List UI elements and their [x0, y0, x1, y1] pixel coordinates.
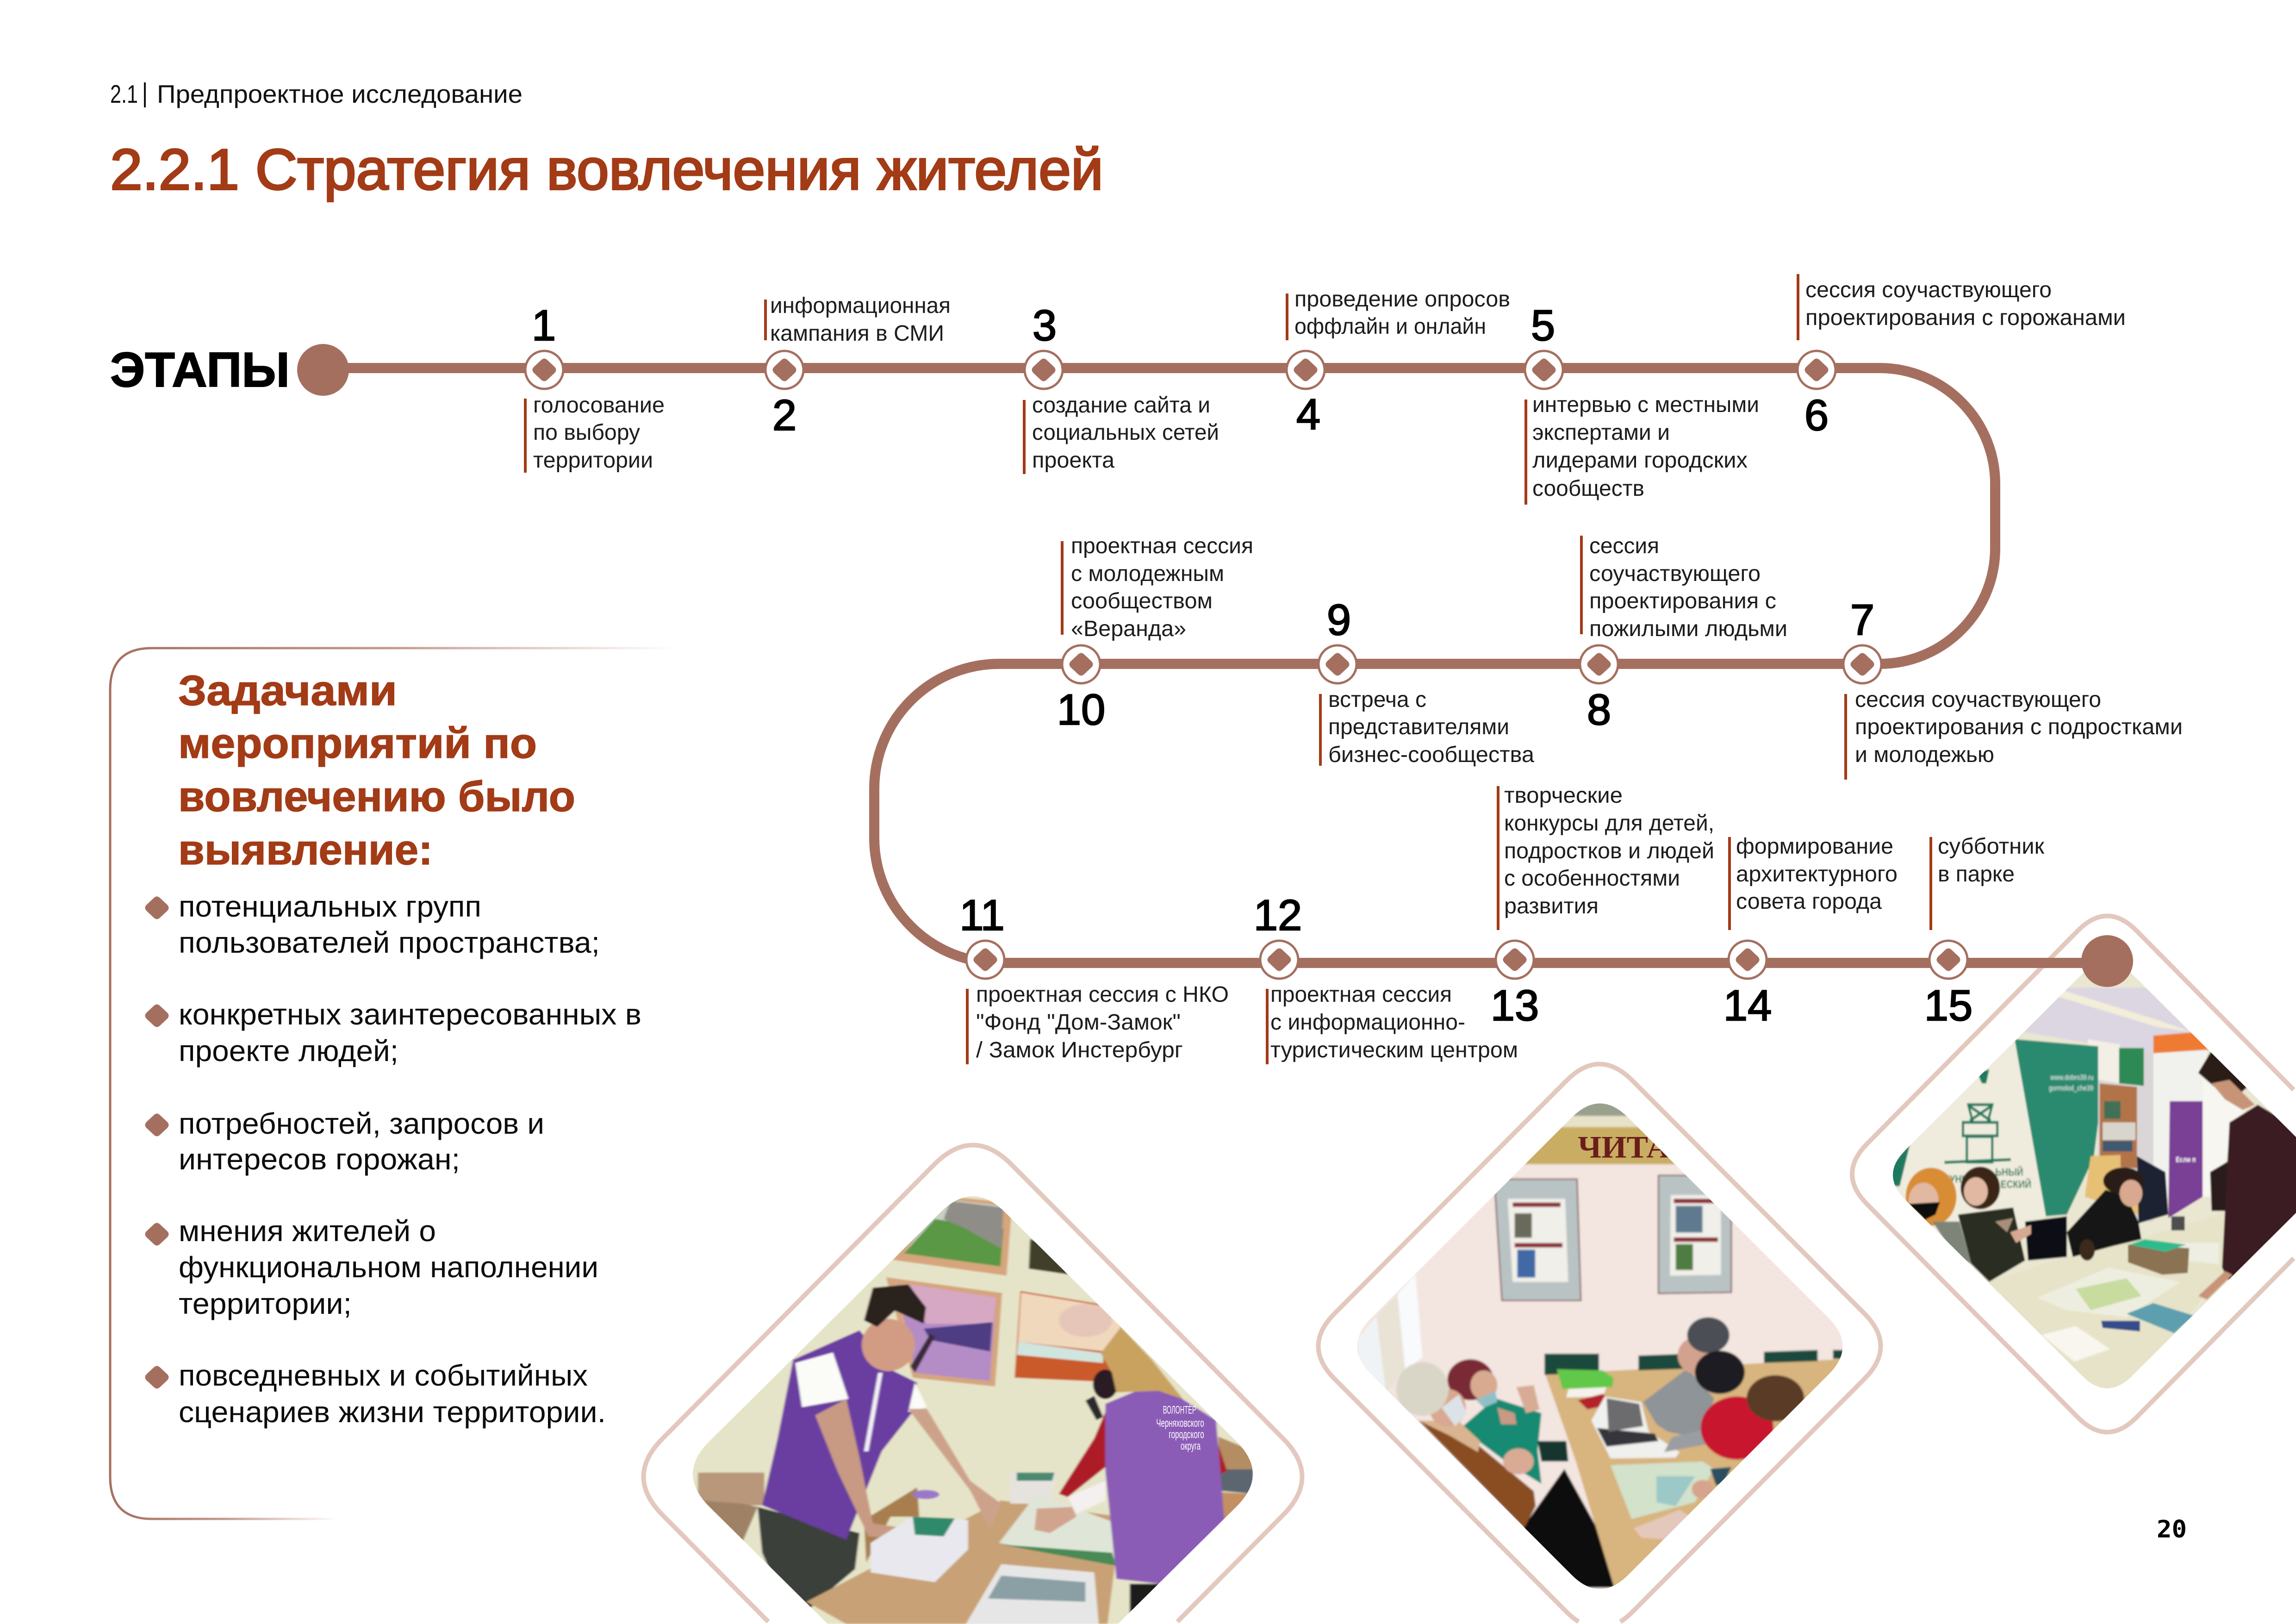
stage 14: 14	[1724, 981, 1772, 1030]
stage 10	[1057, 534, 1253, 734]
stage 4: оффлайн и онлайн	[1294, 314, 1486, 339]
stage 5: сообществ	[1532, 476, 1644, 501]
photo: volunteers with purple vests: городского	[1169, 1429, 1204, 1441]
stage 7: сессия соучаствующего	[1855, 687, 2101, 712]
stage 8	[1580, 534, 1787, 734]
stage 12: туристическим центром	[1270, 1038, 1518, 1062]
stage 14: формирование	[1736, 834, 1893, 859]
stage 9: 9	[1327, 595, 1351, 644]
stage 12: с информационно-	[1270, 1010, 1465, 1035]
stage 9: встреча с	[1328, 687, 1426, 712]
stage 8: сессия	[1589, 534, 1659, 558]
panel heading: Задачами	[178, 667, 397, 714]
section header: 2.1	[110, 80, 138, 108]
stage 14: совета города	[1736, 889, 1882, 914]
end marker	[2081, 935, 2133, 987]
stage 10: проектная сессия	[1071, 534, 1253, 558]
stage 2: 2	[772, 391, 796, 439]
stage 3: проекта	[1032, 448, 1114, 473]
stage 11: 11	[959, 891, 1005, 939]
photo: volunteers with purple vests: Черняховского	[1156, 1417, 1204, 1430]
stage 6: сессия соучаствующего	[1805, 278, 2052, 302]
bullet 5: повседневных и событийных	[179, 1359, 588, 1392]
bullet 3: интересов горожан;	[179, 1143, 460, 1176]
bullet 3	[145, 1107, 544, 1176]
stage 4: проведение опросов	[1294, 287, 1510, 312]
stage 3: социальных сетей	[1032, 420, 1219, 445]
stage 13: подростков и людей	[1504, 839, 1714, 863]
bullet 2	[145, 998, 641, 1068]
stage 10: 10	[1057, 685, 1105, 734]
bullet 2: конкретных заинтересованных в	[179, 998, 641, 1031]
bullet 4: территории;	[179, 1287, 352, 1320]
stage 6	[1797, 274, 2126, 439]
bullet 1: потенциальных групп	[179, 890, 481, 923]
stage 8: 8	[1587, 685, 1611, 734]
section header: Предпроектное исследование	[157, 80, 523, 108]
stage 15	[1924, 834, 2045, 1030]
stage 7: 7	[1850, 595, 1874, 644]
stage 13	[1491, 783, 1714, 1030]
stage 13: развития	[1504, 894, 1599, 918]
stage 11: проектная сессия с НКО	[976, 982, 1229, 1007]
stage 5: экспертами и	[1532, 420, 1670, 445]
timeline path	[323, 368, 2107, 963]
stage 7	[1843, 595, 2183, 780]
photo: session with youth	[1873, 931, 2296, 1399]
stage 9	[1319, 595, 1534, 767]
vest lettering	[1156, 1404, 1204, 1452]
stage 3	[1023, 301, 1219, 474]
wall sign lettering: ЧИТА	[1578, 1130, 1670, 1164]
photo: session with youth: www.dobro39.ru	[2050, 1074, 2093, 1081]
stage 1: голосование	[533, 393, 665, 418]
stage 13: с особенностями	[1504, 866, 1680, 891]
stage 3: 3	[1033, 301, 1057, 350]
stage 13: творческие	[1504, 783, 1623, 808]
stage 13: 13	[1491, 981, 1539, 1030]
photo: session with elderly residents	[1357, 1104, 1843, 1589]
stage 8: проектирования с	[1589, 589, 1776, 613]
photo: session with youth: gormolod_che39	[2049, 1084, 2093, 1092]
photo: volunteers with purple vests	[693, 1196, 1253, 1624]
stage 2: кампания в СМИ	[770, 321, 944, 346]
start marker	[297, 344, 349, 396]
panel heading	[178, 667, 575, 874]
stage 3: создание сайта и	[1032, 393, 1210, 418]
bullet 1	[145, 890, 600, 959]
panel heading: выявление:	[178, 826, 433, 874]
bullet 4	[145, 1214, 598, 1320]
stage 5: интервью с местными	[1532, 393, 1759, 417]
photo frame: volunteers	[643, 1145, 1302, 1622]
panel heading: мероприятий по	[178, 720, 537, 767]
photo: session with youth: Если п	[2176, 1156, 2196, 1163]
bullet 3: потребностей, запросов и	[179, 1107, 544, 1140]
stage 1: территории	[533, 448, 653, 473]
photo: session with youth: ЕСКИЙ	[2001, 1178, 2031, 1190]
bullet 2: проекте людей;	[179, 1034, 398, 1068]
stage 10: сообществом	[1071, 589, 1213, 613]
stage 4: 4	[1296, 390, 1320, 438]
stage 7: и молодежью	[1855, 743, 1994, 767]
stage 7: проектирования с подростками	[1855, 715, 2183, 739]
stage 14	[1724, 834, 1898, 1030]
panel heading: вовлечению было	[178, 773, 575, 820]
stage 4	[1286, 287, 1510, 438]
photo frame: seniors session	[1318, 1064, 1881, 1622]
bullet 4: функциональном наполнении	[179, 1250, 598, 1284]
stage 5: 5	[1531, 301, 1555, 350]
stage 10: с молодежным	[1071, 562, 1224, 586]
stage 11	[959, 891, 1229, 1064]
stage 13: конкурсы для детей,	[1504, 811, 1714, 836]
photo: volunteers with purple vests: ВОЛОНТЁР	[1163, 1404, 1196, 1417]
stage 15: субботник	[1938, 834, 2045, 859]
stage 9: представителями	[1328, 715, 1509, 739]
stage 2	[764, 294, 951, 439]
stage 5	[1524, 301, 1759, 505]
stage 1: 1	[532, 301, 556, 350]
stage 10: «Веранда»	[1071, 617, 1186, 641]
stage 6: 6	[1804, 391, 1829, 439]
stage 1	[524, 301, 665, 473]
stage 8: соучаствующего	[1589, 562, 1761, 586]
page number: 20	[2157, 1516, 2187, 1543]
stage 15: 15	[1924, 981, 1972, 1030]
bullet 1: пользователей пространства;	[179, 926, 600, 959]
stage 15: в парке	[1938, 862, 2015, 887]
bullet 5	[145, 1359, 606, 1429]
bullet 4: мнения жителей о	[179, 1214, 436, 1248]
stage 12	[1254, 891, 1518, 1064]
stage 2: информационная	[770, 294, 951, 318]
vest lettering: округа	[1181, 1440, 1201, 1452]
stage 1: по выбору	[533, 420, 640, 445]
stage 14: архитектурного	[1736, 862, 1898, 887]
heading: stages: ЭТАПЫ	[110, 343, 290, 397]
stage 9: бизнес-сообщества	[1328, 743, 1534, 767]
title: 2.2.1 Стратегия вовлечения жителей	[110, 138, 1103, 202]
bullet 5: сценариев жизни территории.	[179, 1395, 606, 1429]
stage 11: / Замок Инстербург	[976, 1038, 1183, 1062]
photo frame: youth session	[1852, 916, 2294, 1432]
stage 5: лидерами городских	[1532, 448, 1748, 473]
panel: tasks	[109, 648, 676, 1519]
stage 6: проектирования с горожанами	[1805, 306, 2126, 330]
photo: session with youth: МУНИЦ	[1942, 1174, 1975, 1185]
stage 11: "Фонд "Дом-Замок"	[976, 1010, 1181, 1035]
stage 12: проектная сессия	[1270, 982, 1452, 1007]
stage 8: пожилыми людьми	[1589, 617, 1787, 641]
photo: session with youth: ЬНЫЙ	[1995, 1166, 2023, 1178]
stage 12: 12	[1254, 891, 1302, 939]
